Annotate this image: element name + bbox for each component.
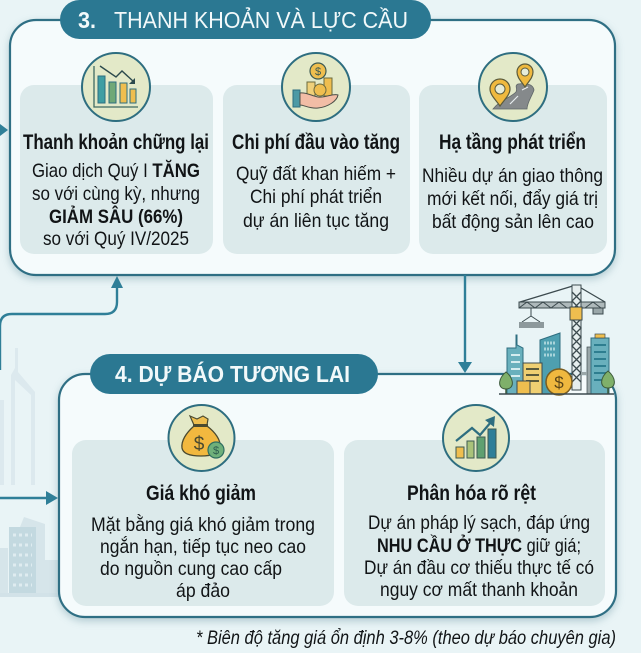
heading pill 3: THANH KHOẢN VÀ LỰC CẦU (114, 5, 408, 33)
heading pill 3: 3. (78, 7, 96, 33)
panel 3: thanh khoản và lực cầu (10, 0, 615, 275)
icon: road with map pins (479, 53, 547, 121)
arrow: into panel 3 from left (0, 124, 8, 136)
icon: money bag: $ (213, 445, 219, 457)
illustration: construction crane and city: $ (554, 373, 564, 392)
card body: do nguồn cung cao cấp (100, 558, 282, 580)
card body: Dự án pháp lý sạch, đáp ứng (368, 512, 590, 534)
card title: Phân hóa rõ rệt (407, 481, 536, 505)
card body: ngắn hạn, tiếp tục neo cao (100, 535, 306, 558)
arrowhead: down into panel 4 (458, 362, 472, 373)
card body (364, 512, 594, 601)
icon: hand holding coins: $ (315, 66, 321, 78)
card body (91, 513, 315, 602)
card body: Dự án đầu cơ thiếu thực tế có (364, 557, 594, 579)
card title: Thanh khoản chững lại (23, 130, 209, 154)
card body: Nhiều dự án giao thông (422, 165, 603, 187)
background skyline illustration (0, 348, 59, 597)
card body: áp đảo (176, 580, 230, 602)
card body: bất động sản lên cao (432, 211, 594, 233)
illustration: construction crane and city (499, 285, 614, 395)
heading pill 4 (90, 354, 378, 394)
card body (236, 163, 396, 232)
card: chi phí đầu vào tăng (223, 53, 410, 254)
arrow: down from panel 3 to panel 4 (464, 275, 466, 362)
icon: money bag: $ (194, 434, 205, 455)
card: phân hóa rõ rệt (344, 405, 605, 606)
heading pill 4: 4. DỰ BÁO TƯƠNG LAI (115, 360, 350, 387)
card body: Chi phí phát triển (250, 186, 382, 208)
card body: so với cùng kỳ, nhưng (32, 183, 200, 205)
icon: rising bar chart (443, 405, 509, 471)
card: giá khó giảm (72, 405, 334, 606)
card title: Giá khó giảm (146, 481, 256, 505)
card body: mới kết nối, đẩy giá trị (427, 188, 598, 210)
heading pill 3 (60, 0, 431, 39)
icon: falling bar chart (82, 53, 150, 121)
arrow: up into panel 3 (0, 276, 123, 370)
panel 4: dự báo tương lai (59, 354, 616, 617)
card body (32, 159, 200, 250)
card body: Quỹ đất khan hiếm + (236, 163, 396, 185)
card title: Hạ tầng phát triển (439, 130, 586, 154)
card body (422, 165, 603, 233)
card: hạ tầng phát triển (419, 53, 607, 254)
card body: GIẢM SÂU (66%) (49, 204, 183, 228)
icon: hand holding coins (282, 53, 350, 121)
arrow: right into panel 4 (0, 491, 58, 505)
card body: Giao dịch Quý I TĂNG (32, 159, 200, 182)
card body: dự án liên tục tăng (243, 210, 389, 232)
card body: NHU CẦU Ở THỰC giữ giá; (377, 533, 581, 557)
card: thanh khoản chững lại (20, 53, 213, 254)
icon: money bag (168, 405, 234, 471)
card title: Chi phí đầu vào tăng (232, 130, 400, 154)
card body: so với Quý IV/2025 (43, 228, 189, 250)
card body: Mặt bằng giá khó giảm trong (91, 513, 315, 536)
card body: nguy cơ mất thanh khoản (380, 579, 578, 601)
